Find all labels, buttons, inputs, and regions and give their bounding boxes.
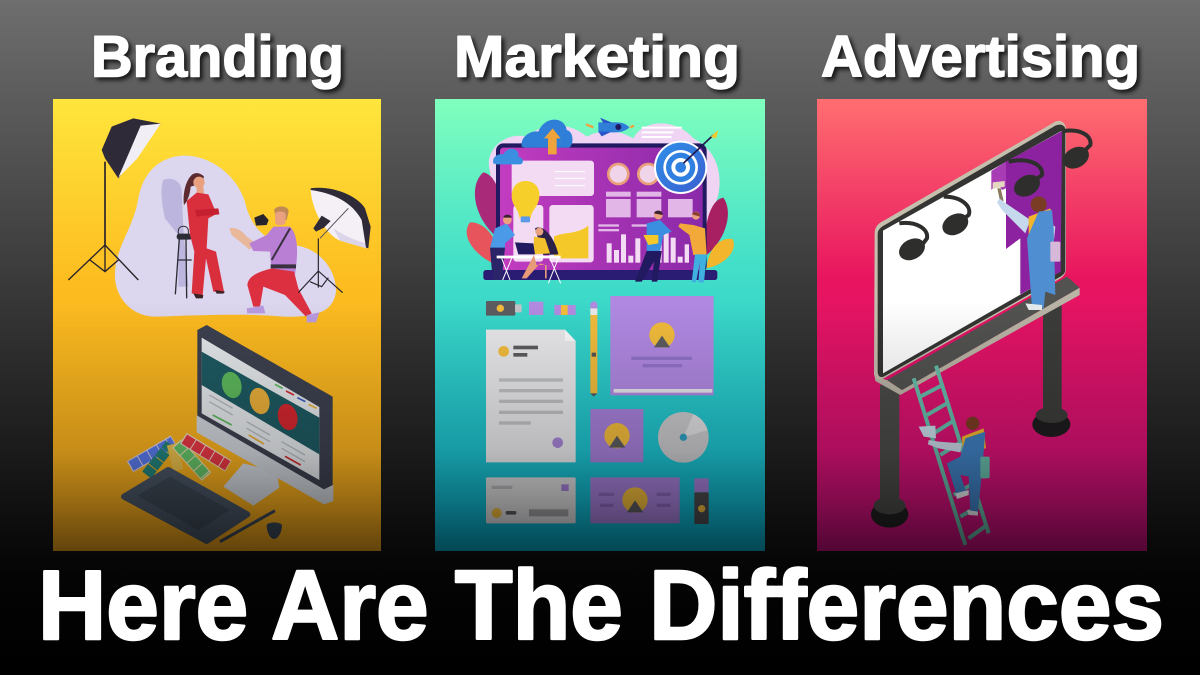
laptop screen <box>483 143 717 280</box>
icon: colour swatches <box>130 438 228 477</box>
man photographer <box>229 206 319 322</box>
billboard frame <box>874 121 1066 379</box>
icon: target with arrow <box>654 130 718 194</box>
colour chips <box>529 302 576 315</box>
panel background yellow <box>53 99 381 551</box>
woman shadow <box>162 179 188 287</box>
ladder <box>914 366 989 545</box>
panel background pink <box>817 99 1147 551</box>
dashboard cards <box>512 161 693 262</box>
icon: purple square card <box>590 409 643 462</box>
panel: branding <box>53 99 381 551</box>
people standing <box>635 211 707 282</box>
icon: upload cloud <box>493 120 572 164</box>
heading: Advertising: Advertising <box>821 24 1140 90</box>
panel bottom shade <box>53 300 381 551</box>
worker on ladder <box>919 417 990 516</box>
note lines <box>642 128 682 137</box>
icon: disc <box>658 412 709 463</box>
icon: small usb <box>694 478 709 524</box>
icon: pencil <box>590 301 597 397</box>
icon: pen cup <box>267 522 282 539</box>
panel background teal <box>435 99 765 551</box>
icon: business card <box>486 477 576 523</box>
icon: purple notebook <box>610 296 714 395</box>
icon: rocket <box>586 118 634 136</box>
icon: letter document <box>486 330 576 462</box>
worker painting billboard <box>993 181 1060 310</box>
icon: usb drive <box>486 301 522 316</box>
plants <box>467 172 734 268</box>
icon: stylus <box>220 511 275 542</box>
illustration: photo studio and design desk <box>68 118 371 542</box>
icon: purple banner card <box>590 477 680 523</box>
billboard posts <box>871 302 1070 528</box>
icon: drawing tablet <box>124 470 247 541</box>
cloud backdrop <box>489 123 720 228</box>
panel bottom shade <box>435 300 765 551</box>
backdrop blob <box>115 156 336 317</box>
bar chart <box>607 232 689 263</box>
woman in red suit <box>184 173 225 298</box>
illustration: marketing dashboard and stationery <box>467 118 734 524</box>
panel: marketing <box>435 99 765 551</box>
people at desk <box>490 215 561 283</box>
heading: Marketing: Marketing <box>454 24 740 90</box>
icon: monitor <box>197 325 333 506</box>
panel bottom shade <box>817 300 1147 551</box>
stool <box>175 226 192 298</box>
title: Here Are The Differences <box>38 550 1164 660</box>
panel: advertising <box>817 99 1147 551</box>
icon: umbrella light <box>298 188 371 293</box>
billboard platform <box>875 277 1080 395</box>
icon: lightbulb <box>512 181 539 222</box>
billboard lamps <box>895 130 1093 265</box>
heading: Branding: Branding <box>91 24 344 90</box>
icon: softbox light <box>68 118 161 280</box>
illustration: billboard with workers <box>871 121 1093 545</box>
